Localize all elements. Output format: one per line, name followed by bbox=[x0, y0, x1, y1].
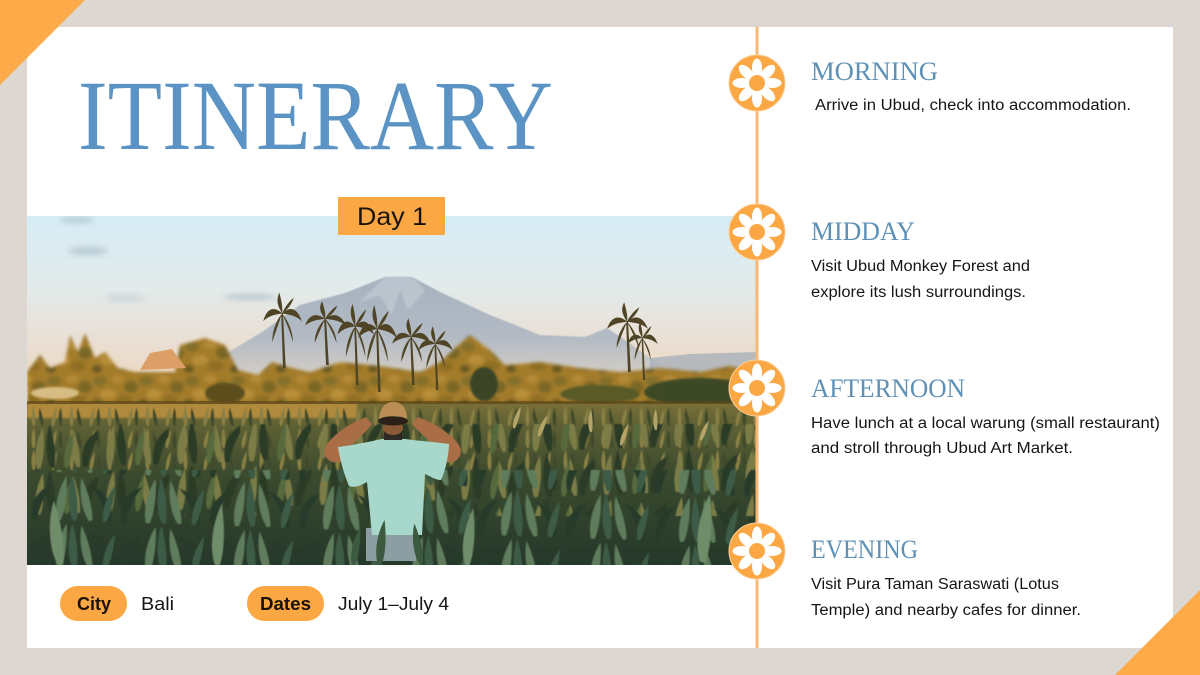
section: morning: MORNING bbox=[811, 57, 938, 86]
clouds bbox=[60, 217, 277, 302]
flower marker: midday bbox=[729, 204, 785, 260]
flower marker: morning bbox=[729, 55, 785, 111]
neck bbox=[384, 431, 402, 440]
field base bbox=[27, 403, 756, 565]
flower marker: afternoon bbox=[729, 360, 785, 416]
section: morning: Arrive in Ubud, check into accommodation. bbox=[815, 97, 1131, 114]
section: evening: Temple) and nearby cafes for dinner. bbox=[811, 602, 1081, 619]
section: afternoon: AFTERNOON bbox=[811, 374, 965, 403]
dark tree masses bbox=[205, 367, 756, 406]
flower marker: evening bbox=[729, 523, 785, 579]
day badge bbox=[338, 197, 445, 235]
section: morning bbox=[811, 57, 1131, 114]
city label and value bbox=[60, 586, 174, 621]
title: ITINERARY bbox=[78, 60, 553, 171]
section: evening: EVENING bbox=[811, 535, 918, 564]
left arm bbox=[324, 417, 372, 462]
corner triangle: top left bbox=[0, 0, 85, 85]
section: midday: explore its lush surroundings. bbox=[811, 284, 1026, 301]
corner triangle: bottom right bbox=[1115, 590, 1200, 675]
section: afternoon: and stroll through Ubud Art Market. bbox=[811, 440, 1073, 457]
sky bbox=[27, 216, 756, 386]
city label and value: Bali bbox=[141, 594, 174, 614]
section: evening bbox=[811, 535, 1081, 619]
dates label and value bbox=[247, 586, 449, 621]
hat brim band bbox=[378, 416, 408, 426]
tree line bbox=[27, 333, 756, 408]
person bbox=[324, 402, 461, 561]
right arm bbox=[412, 417, 461, 462]
house roof bbox=[140, 349, 186, 370]
city label and value: City bbox=[77, 594, 111, 614]
dates label and value: Dates bbox=[260, 594, 311, 614]
section: midday: Visit Ubud Monkey Forest and bbox=[811, 258, 1030, 275]
shirt bbox=[338, 439, 449, 535]
dates label and value: July 1–July 4 bbox=[338, 594, 449, 614]
dark field edge bbox=[27, 401, 756, 404]
section: midday: MIDDAY bbox=[811, 217, 915, 246]
section: evening: Visit Pura Taman Saraswati (Lotus bbox=[811, 576, 1059, 593]
pale building bbox=[31, 387, 79, 399]
day badge: Day 1 bbox=[357, 203, 427, 231]
sunlit strip bbox=[27, 403, 357, 418]
jeans bbox=[366, 528, 416, 561]
timeline line bbox=[756, 27, 758, 648]
corn rows bbox=[27, 404, 756, 566]
section: afternoon: Have lunch at a local warung (small restaurant) bbox=[811, 415, 1160, 432]
large foreground leaves bbox=[46, 493, 715, 566]
photo: traveller in a corn field with a volcano behind bbox=[27, 216, 756, 566]
distant ridge bbox=[650, 352, 756, 374]
section: midday bbox=[811, 217, 1030, 301]
mountain snow streaks bbox=[362, 278, 424, 313]
section: afternoon bbox=[811, 374, 1160, 457]
hat bbox=[379, 402, 407, 419]
foreground leaves over the person bbox=[349, 519, 425, 566]
mountain bbox=[228, 276, 650, 375]
sunlit tassels bbox=[511, 406, 710, 446]
head bbox=[383, 424, 403, 435]
palm trees bbox=[263, 293, 658, 392]
